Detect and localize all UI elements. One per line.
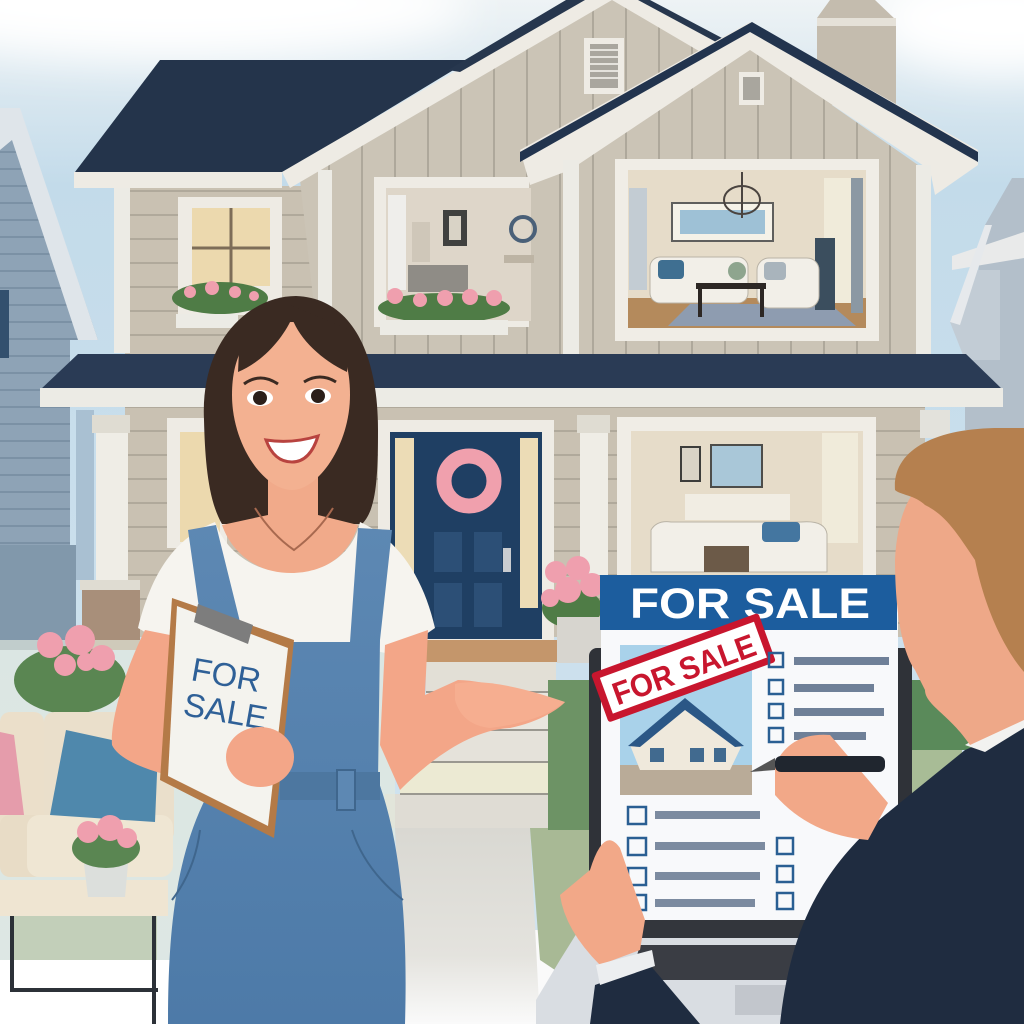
sleeve: [590, 965, 700, 1024]
hair back: [204, 296, 378, 524]
attic vent central: [584, 38, 624, 94]
clipboard: FOR: [189, 650, 264, 699]
writing hand: [775, 735, 888, 840]
right column: [577, 410, 950, 575]
upper middle window: [374, 177, 535, 327]
lower left wall upper storey: [125, 186, 325, 358]
wreath: [444, 456, 494, 506]
checklist top: [769, 653, 783, 742]
neighbouring house right: [950, 178, 1024, 430]
for sale board: [589, 575, 912, 938]
flower box middle: [378, 288, 510, 335]
listing photo: [620, 645, 752, 795]
side table: [0, 880, 168, 1024]
flower box left: [172, 281, 268, 314]
pen: [750, 756, 885, 772]
man: [560, 428, 1024, 1024]
left arm: [112, 630, 294, 790]
left column: [80, 415, 140, 650]
hand: [226, 727, 294, 787]
flower bush by door: [541, 556, 604, 663]
upper right window living room: [615, 159, 879, 341]
lower right window: [617, 417, 876, 587]
suit: [780, 725, 1024, 1024]
face: [232, 322, 350, 490]
lower wall: [125, 407, 925, 637]
front walk and lawn: [0, 640, 972, 1024]
lower left window: [167, 418, 227, 548]
potted plant: [72, 815, 140, 897]
white tee: [138, 522, 435, 655]
smile: [266, 436, 318, 462]
central gable: [282, 0, 722, 360]
hair: [895, 428, 1024, 672]
laptop: [536, 920, 905, 1024]
left hand: [560, 840, 645, 965]
apron: [168, 525, 406, 1024]
woman: [112, 296, 565, 1024]
clipboard: SALE: [181, 685, 270, 737]
porch steps: [385, 640, 558, 828]
right gable: [520, 22, 978, 356]
chimney: [817, 0, 896, 105]
clipboard: [160, 598, 294, 838]
patio sofa: [0, 712, 174, 877]
necklace: [255, 508, 333, 550]
head: [895, 470, 1024, 745]
right arm: [380, 630, 565, 790]
fascia left roof: [74, 172, 282, 188]
flower bush left: [14, 625, 126, 714]
left roof: [75, 60, 470, 172]
eyes: [244, 377, 336, 406]
neck: [222, 470, 358, 574]
upper left window: [176, 197, 282, 328]
front door: [378, 420, 554, 640]
porch roof: [40, 354, 1003, 407]
checklist bottom: [628, 807, 793, 910]
red sticker: FOR SALE: [607, 627, 761, 712]
heading: FOR SALE: [630, 580, 870, 628]
house main: [40, 0, 1003, 650]
neighbouring house left: [0, 108, 98, 650]
